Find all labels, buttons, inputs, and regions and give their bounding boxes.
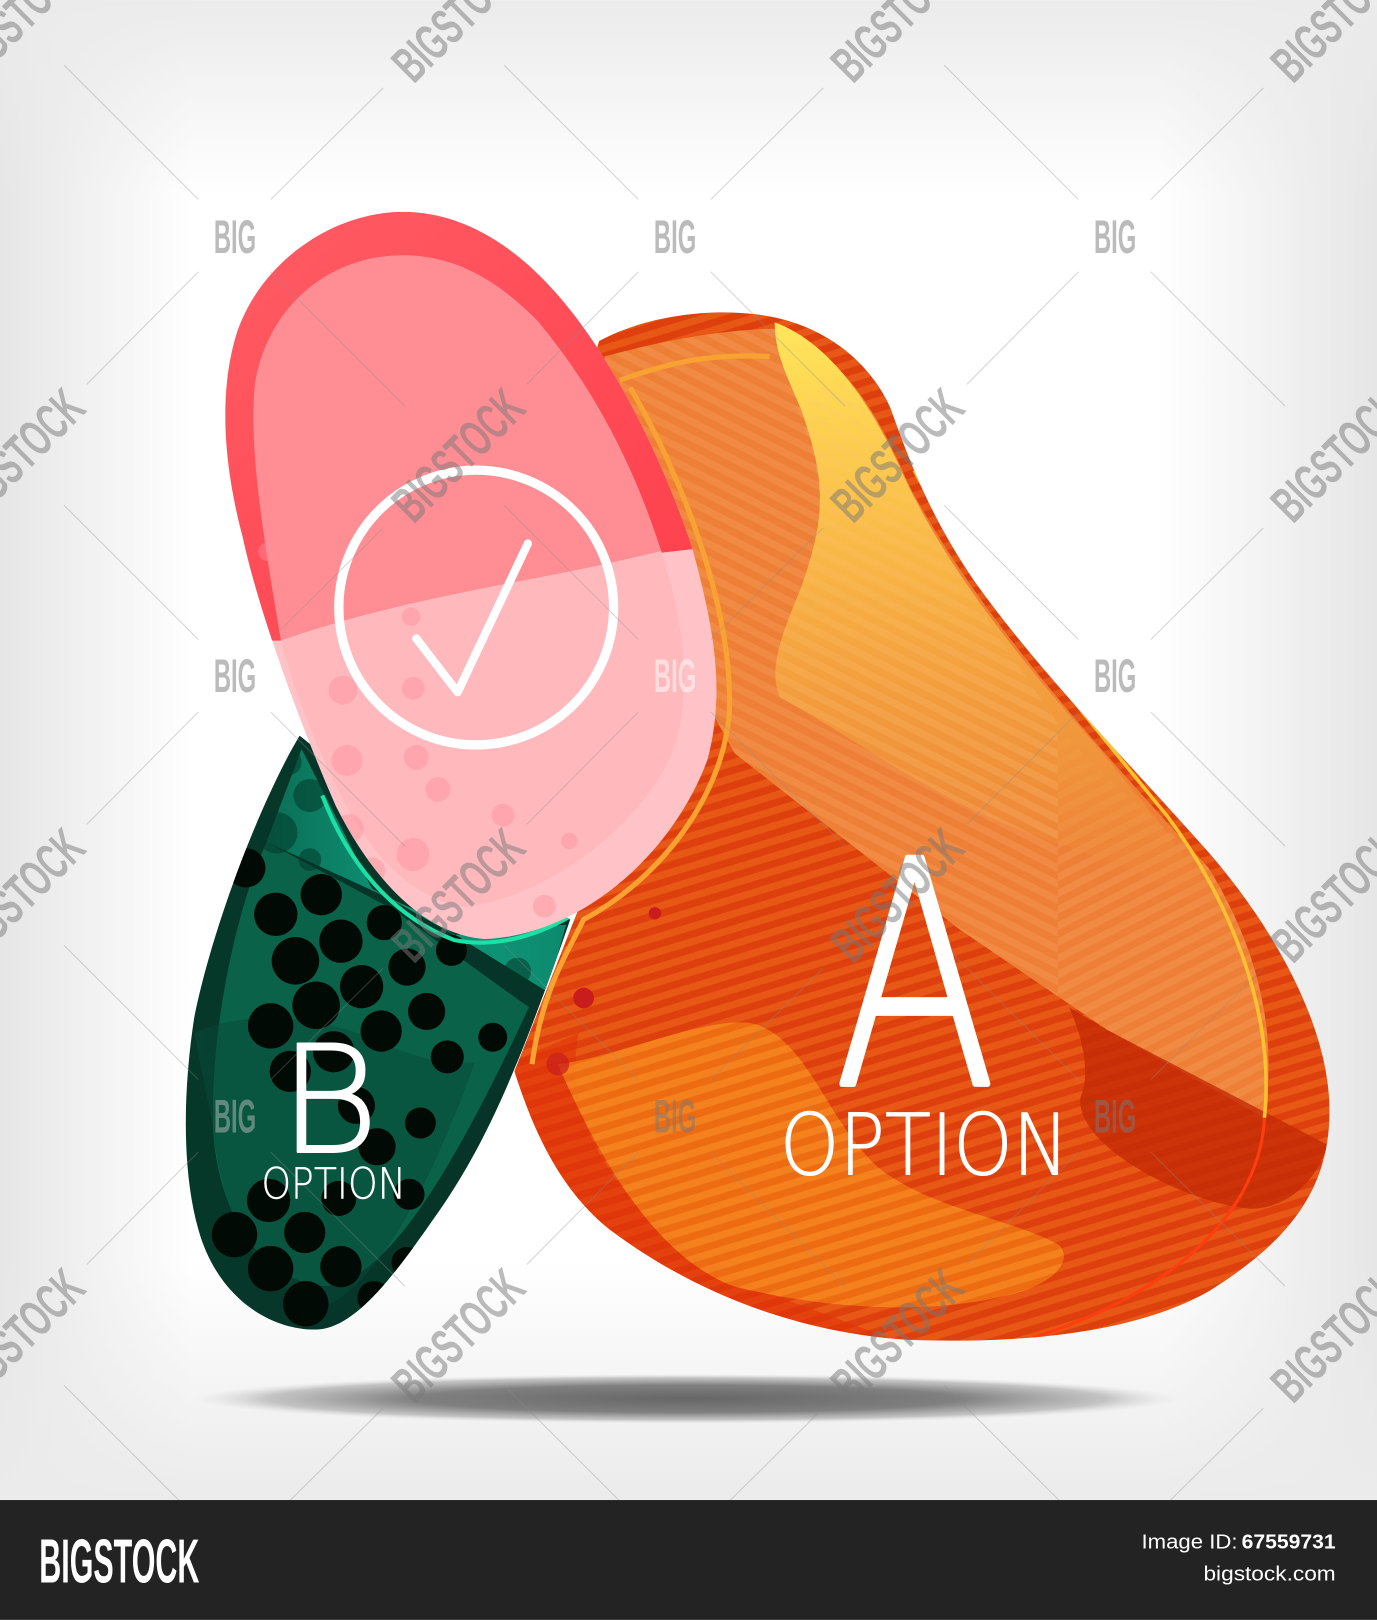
- A inner rim near pink: [532, 356, 770, 1064]
- option B label: [261, 1015, 406, 1208]
- pink top rim: [225, 212, 692, 641]
- watermark text: BIGSTOCK: [381, 378, 536, 533]
- B dots: [212, 848, 507, 1327]
- shape: pink pill: [207, 196, 723, 939]
- shape B: green drop: [186, 736, 570, 1330]
- B dark rim: [186, 736, 570, 1330]
- watermark text: BIG: [654, 211, 696, 264]
- watermark text: BIGSTOCK: [381, 1258, 536, 1413]
- pink dots: [258, 542, 577, 917]
- icon: check circle: [339, 470, 614, 745]
- watermark text: BIG: [654, 1090, 696, 1143]
- B teal top: [267, 749, 566, 992]
- A yellow rim line: [914, 470, 1266, 1118]
- watermark text: BIG: [214, 650, 256, 703]
- letter B: B: [279, 1015, 379, 1188]
- option A label: [780, 797, 1069, 1195]
- A yellow highlight: [774, 322, 1167, 834]
- pink lower panel: [281, 551, 684, 907]
- A red rim line: [1033, 1118, 1264, 1338]
- footer bar: BIGSTOCK: [39, 1528, 199, 1597]
- A base stripes: [496, 300, 1343, 1353]
- watermark text: BIG: [1094, 650, 1136, 703]
- pink base: [225, 212, 716, 939]
- option A caption: OPTION: [780, 1096, 1069, 1195]
- watermark text: BIG: [214, 1090, 256, 1143]
- A bottom swoop: [558, 1022, 1064, 1307]
- A base fill: [496, 300, 1343, 1353]
- site url: bigstock.com: [1203, 1563, 1336, 1586]
- shape A: orange blob: [496, 300, 1343, 1353]
- watermark text: BIGSTOCK: [820, 818, 975, 973]
- image id: Image ID:: [1141, 1531, 1238, 1554]
- A spots: [546, 907, 661, 1075]
- A right stripes: [1058, 824, 1268, 1111]
- option B caption: OPTION: [261, 1159, 406, 1208]
- ground shadow: [193, 1374, 1181, 1424]
- A yellow stripes: [775, 382, 1058, 847]
- watermark text: BIG: [1094, 1090, 1136, 1143]
- B lower darker band: [194, 1018, 475, 1304]
- letter A: A: [835, 797, 996, 1158]
- watermark text: BIGSTOCK: [820, 1258, 975, 1413]
- A upper light panel: [604, 329, 1268, 1118]
- B inner panel: [213, 842, 529, 1286]
- watermark text: BIGSTOCK: [381, 818, 536, 973]
- watermark text: BIG: [214, 211, 256, 264]
- footer bar: [0, 1500, 1377, 1620]
- A dark crescent: [1069, 1007, 1327, 1209]
- watermark text: BIG: [654, 650, 696, 703]
- image id number: 67559731: [1242, 1531, 1336, 1554]
- watermark text: BIGSTOCK: [820, 378, 975, 533]
- A upper stripes: [604, 329, 1058, 996]
- A swoop stripes: [558, 1022, 1064, 1307]
- A lower left red rim: [514, 1033, 890, 1338]
- B bright edge: [322, 796, 568, 943]
- pink top panel: [253, 255, 661, 641]
- watermark text: BIG: [1094, 211, 1136, 264]
- B translucent teal dots: [256, 750, 531, 985]
